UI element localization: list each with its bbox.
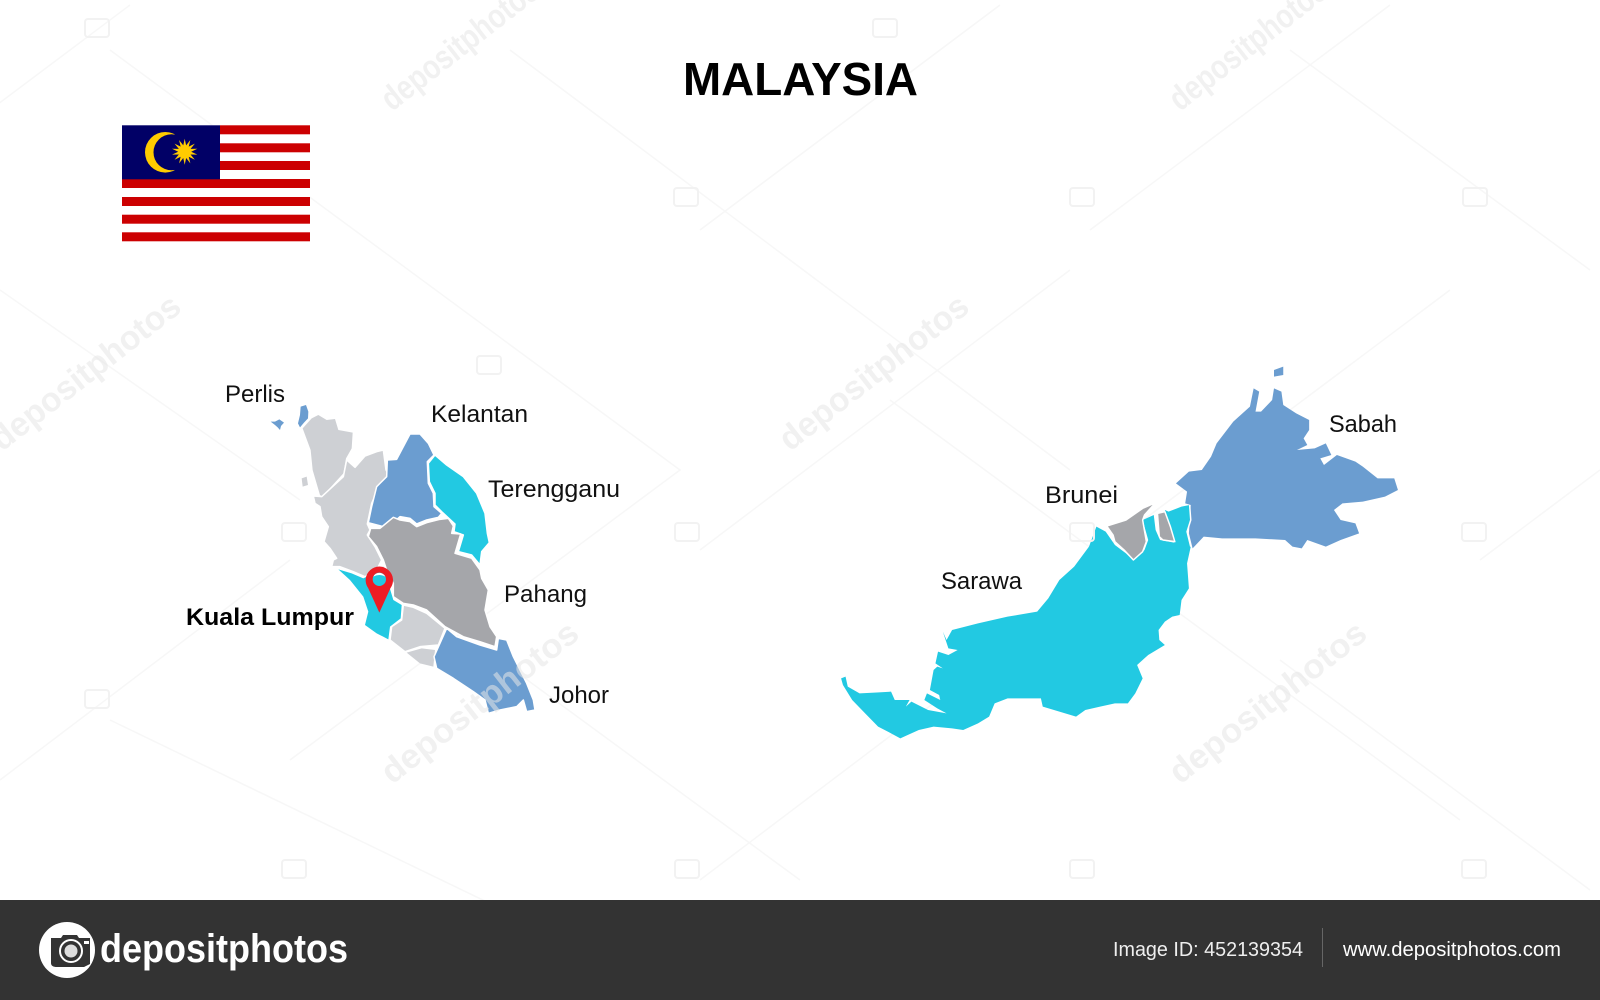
region: Johor <box>434 628 535 713</box>
region: Kedah and Penang <box>302 415 353 496</box>
icon: location pin <box>366 567 393 613</box>
region: Negeri Sembilan <box>390 605 445 652</box>
map: Peninsular Malaysia <box>271 405 535 713</box>
labels: place names <box>186 381 1397 709</box>
labels: place names: Johor <box>549 682 609 709</box>
region: Terengganu <box>428 455 489 565</box>
labels: place names: Perlis <box>225 381 285 408</box>
watermark: depositphotos repeats <box>0 0 1374 791</box>
region: Sarawak <box>841 505 1191 738</box>
region: Selangor <box>338 567 402 639</box>
website url: www.depositphotos.com <box>1342 939 1561 961</box>
region: Temburong <box>1157 512 1175 542</box>
labels: place names: Terengganu <box>488 476 620 503</box>
watermark: depositphotos repeats: depositphotos <box>374 614 586 791</box>
labels: place names: Kuala Lumpur <box>186 604 354 631</box>
watermark: camera marks <box>85 19 1487 878</box>
flag of Malaysia <box>122 125 310 250</box>
labels: place names: Brunei <box>1045 482 1118 509</box>
logo wordmark: depositphotos <box>100 927 348 971</box>
watermark: depositphotos repeats: depositphotos <box>1162 614 1374 791</box>
icon: camera logo <box>39 922 95 978</box>
region: Perak <box>313 450 390 577</box>
footer bar <box>0 900 1600 1000</box>
watermark: depositphotos repeats: depositphotos <box>772 287 976 458</box>
labels: place names: Sarawa <box>941 568 1023 595</box>
map: East Malaysia and Brunei <box>841 367 1398 738</box>
region: Brunei <box>1107 503 1156 560</box>
region: Sabah <box>1176 367 1398 548</box>
region: Melaka <box>407 648 435 667</box>
title: MALAYSIA <box>683 53 918 105</box>
labels: place names: Kelantan <box>431 401 528 428</box>
labels: place names: Pahang <box>504 581 587 608</box>
region: Perlis and Langkawi <box>271 405 308 430</box>
region: Kelantan <box>368 434 442 527</box>
image id: Image ID: 452139354 <box>1113 939 1303 961</box>
region: Pahang <box>368 517 497 647</box>
labels: place names: Sabah <box>1329 411 1397 438</box>
